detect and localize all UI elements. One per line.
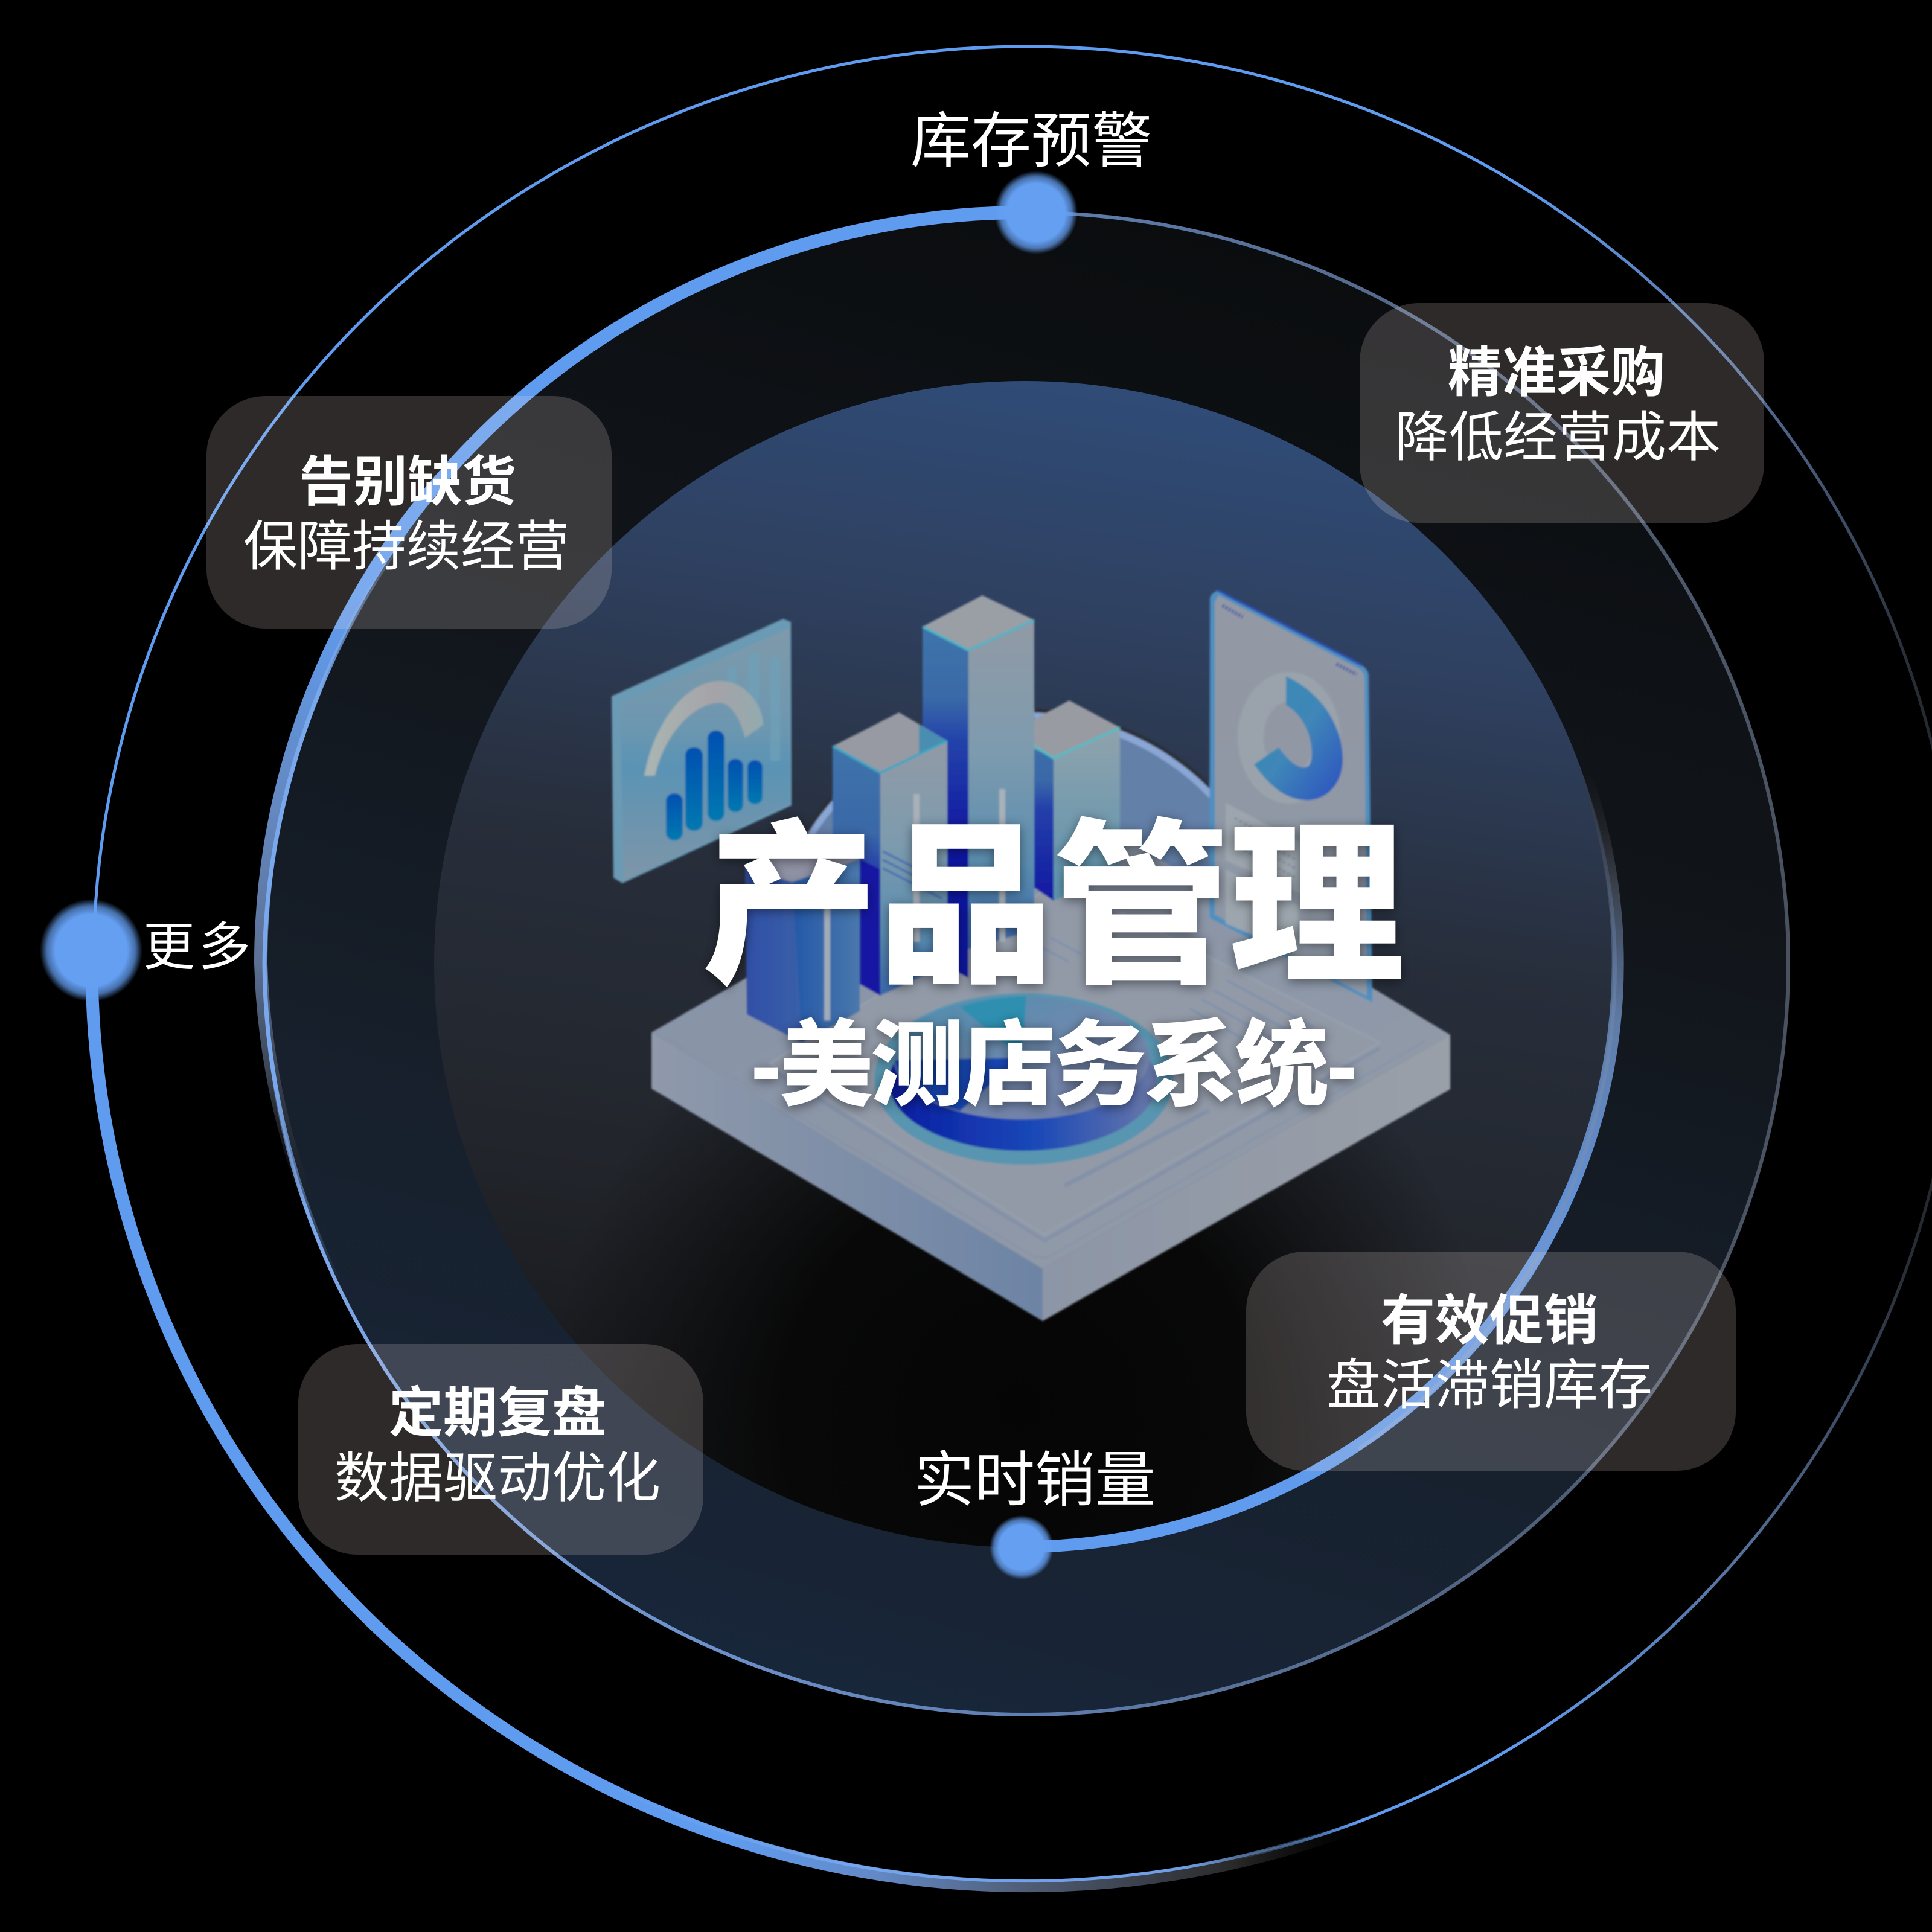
- cylinder bars: [666, 731, 763, 840]
- inner disk: [434, 381, 1615, 1547]
- card: 有效促销: 有效促销: [1381, 1291, 1598, 1351]
- title: 产品管理: [702, 809, 1405, 1005]
- card: 告别缺货: [206, 396, 612, 629]
- gauge arc: [644, 681, 763, 776]
- card: 定期复盘: 数据驱动优化: [334, 1448, 661, 1509]
- dashboard panel: [612, 619, 792, 883]
- card: 精准采购: 降低经营成本: [1395, 408, 1721, 468]
- tower: left: [833, 712, 947, 996]
- inner thick arc: [1020, 776, 1618, 1547]
- label: 库存预警: 库存预警: [910, 107, 1152, 175]
- node: left dot: [40, 899, 142, 1002]
- tower: right: [1034, 700, 1120, 901]
- phone panel: [1209, 590, 1372, 1002]
- middle disk and ring: [261, 213, 1788, 1715]
- card: 告别缺货: 保障持续经营: [243, 517, 569, 577]
- label: 实时销量: 实时销量: [914, 1447, 1156, 1514]
- card: 定期复盘: 定期复盘: [389, 1383, 606, 1444]
- label: 更多: 更多: [143, 918, 254, 976]
- card: 定期复盘: [298, 1344, 703, 1555]
- card: 精准采购: 精准采购: [1448, 343, 1665, 403]
- platform: [651, 798, 1450, 1321]
- donut chart: [1238, 672, 1343, 804]
- central illustration: [612, 590, 1450, 1321]
- pie chart on platform: [874, 993, 1174, 1165]
- back disk behind towers: [765, 709, 1288, 1232]
- card: 告别缺货: 告别缺货: [299, 452, 516, 513]
- card: 有效促销: 盘活滞销库存: [1326, 1355, 1652, 1416]
- card: 有效促销: [1246, 1252, 1736, 1471]
- tower: center: [923, 595, 1034, 978]
- card: 精准采购: [1360, 303, 1764, 523]
- node: bottom dot: [990, 1515, 1054, 1579]
- tower: front: [745, 836, 860, 1043]
- subtitle: -美测店务系统-: [750, 1013, 1355, 1118]
- node: top dot: [994, 171, 1078, 254]
